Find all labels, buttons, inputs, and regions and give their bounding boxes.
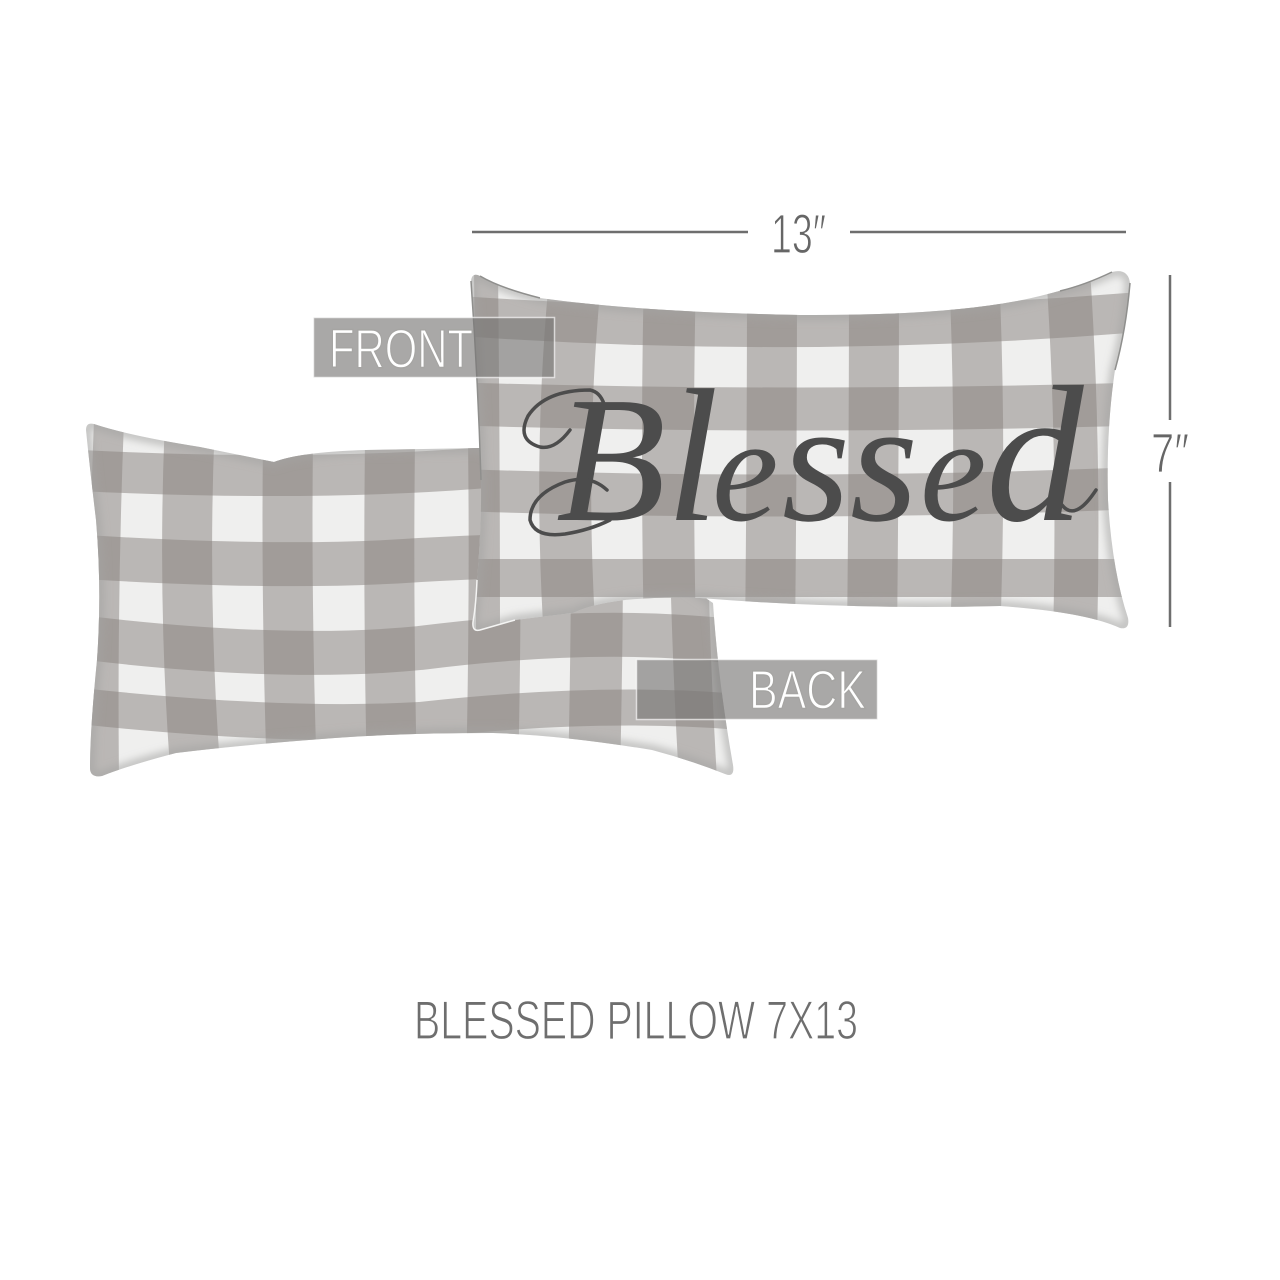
lettering: Blessed: e — [920, 387, 987, 553]
label: BACK: BACK — [749, 658, 866, 720]
infographic canvas — [86, 214, 1188, 1039]
title: BLESSED PILLOW 7X13 — [414, 989, 858, 1051]
dimension: width 13 inches: 13″ — [771, 202, 826, 265]
dimension: height 7 inches: 7″ — [1151, 421, 1189, 484]
lettering: Blessed: B — [556, 360, 666, 559]
lettering: Blessed: l — [666, 352, 719, 562]
lettering: Blessed: d — [986, 347, 1084, 563]
pillow: front — [460, 270, 1140, 640]
lettering: Blessed — [524, 347, 1096, 563]
flourishes around the script letters — [524, 390, 1096, 535]
label: BACK — [636, 658, 878, 720]
lettering: Blessed: s — [850, 364, 918, 558]
lettering: Blessed: e — [712, 387, 779, 553]
label: FRONT: FRONT — [329, 318, 473, 380]
lettering: Blessed: s — [782, 364, 850, 558]
pillow: back — [70, 420, 740, 780]
